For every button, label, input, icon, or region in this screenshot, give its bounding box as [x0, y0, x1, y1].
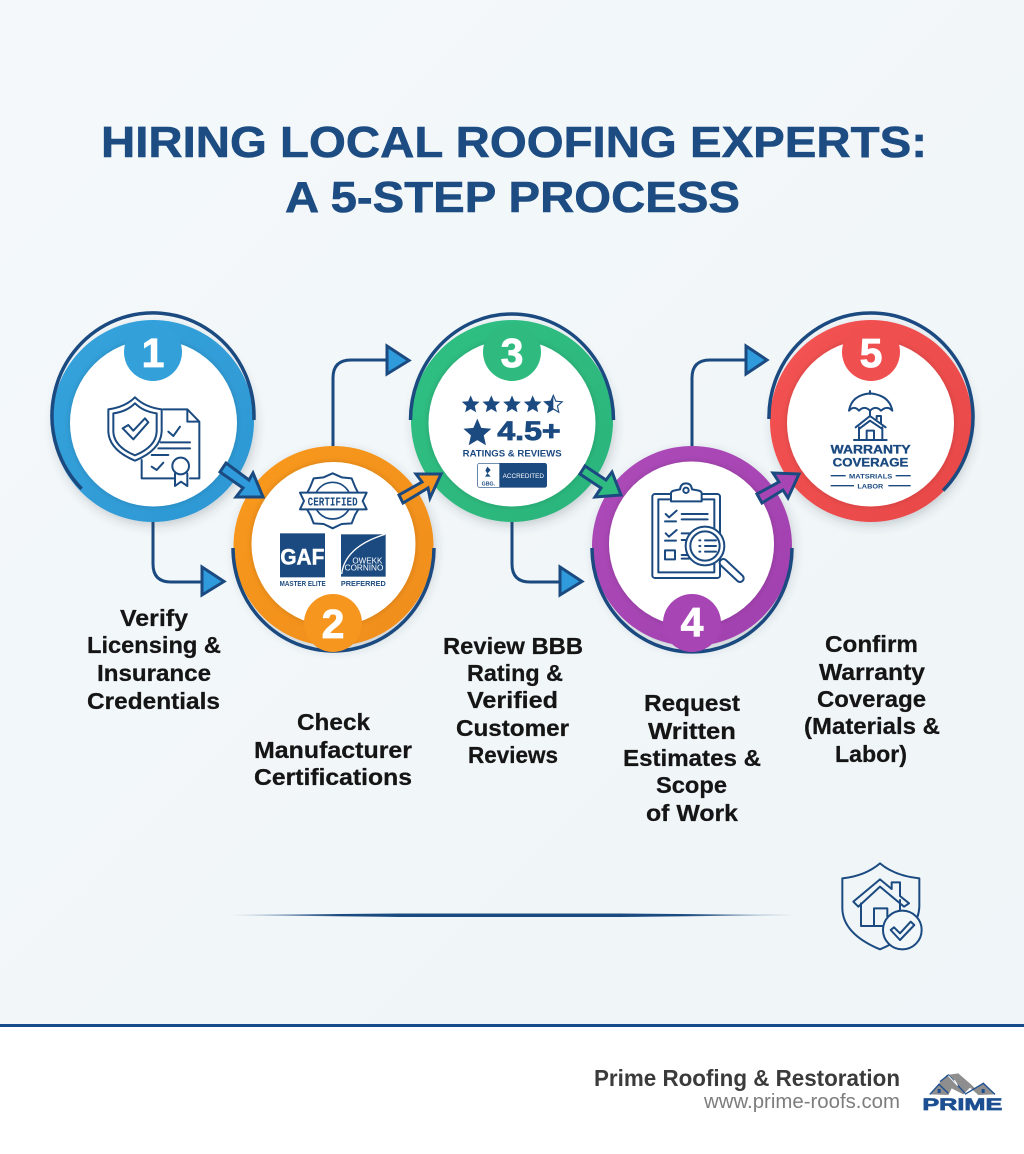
arrow: elbow step 2 to 3 — [333, 346, 409, 448]
number badge 1: 1 — [142, 330, 164, 376]
text block: step 3 label — [443, 633, 583, 768]
BBB accredited badge: ACCREDITED — [503, 473, 544, 480]
text block: step 5 label — [804, 631, 940, 767]
number badge 1 — [124, 323, 182, 381]
icon: ratings and BBB badge — [462, 395, 562, 487]
panel: step 1 circle — [52, 313, 254, 522]
text block: step 3 label: Verified — [467, 687, 558, 713]
icon: shield with house and check — [842, 863, 922, 949]
text block: step 1 label: Insurance — [97, 660, 211, 686]
text block: step 5 label: Coverage — [817, 686, 926, 712]
rating: 4.5+ — [497, 416, 561, 446]
umbrella and house — [849, 391, 892, 440]
title: HIRING LOCAL ROOFING EXPERTS: — [101, 118, 927, 167]
panel: step 2 circle — [233, 446, 434, 652]
icon: certified seal and manufacturer logos — [280, 473, 386, 588]
text block: step 2 label: Certifications — [254, 764, 412, 790]
text block: step 1 label — [87, 605, 221, 714]
Owens Corning logo — [341, 534, 386, 588]
GAF logo — [280, 533, 326, 588]
number badge 4 — [663, 594, 721, 652]
certified seal: CERTIFIED — [308, 495, 358, 509]
text block: step 4 label: Scope — [656, 772, 727, 798]
BBB accredited badge: GBG. — [482, 481, 495, 487]
Owens Corning logo: PREFERRED — [341, 579, 386, 588]
divider line — [225, 914, 800, 917]
text block: step 2 label: Manufacturer — [254, 737, 412, 763]
text block: step 3 label: Reviews — [468, 742, 558, 768]
text block: step 1 label: Licensing & — [87, 632, 221, 658]
text block: step 3 label: Rating & — [467, 660, 563, 686]
number badge 5: 5 — [860, 330, 882, 376]
number badge 3 — [483, 323, 541, 381]
number badge 2: 2 — [322, 601, 344, 647]
warranty text: LABOR — [857, 483, 884, 490]
number badge 2 — [304, 594, 362, 652]
title — [101, 118, 927, 222]
title: A 5-STEP PROCESS — [285, 173, 740, 222]
arrow: elbow step 4 to 5 — [692, 346, 767, 448]
text block: step 5 label: Warranty — [819, 659, 925, 685]
GAF logo: GAF — [280, 544, 324, 569]
panel: step 3 circle — [410, 314, 614, 522]
warranty text: WARRANTY — [831, 442, 911, 456]
text block: step 5 label: Confirm — [825, 631, 918, 657]
icon: umbrella over house with warranty text — [831, 391, 911, 490]
text block: step 2 label — [254, 709, 412, 790]
footer company name and url — [594, 1065, 900, 1113]
panel: step 4 circle — [592, 446, 792, 652]
icon: clipboard and magnifier — [652, 483, 740, 578]
text block: step 4 label: Estimates & — [623, 745, 761, 771]
five stars — [462, 395, 562, 412]
number badge 5 — [842, 323, 900, 381]
text block: step 4 label: Request — [644, 690, 740, 716]
text block: step 3 label: Customer — [456, 715, 569, 741]
text block: step 1 label: Verify — [120, 605, 188, 631]
text block: step 5 label: (Materials & — [804, 713, 940, 739]
BBB accredited badge — [478, 463, 547, 487]
warranty text: COVERAGE — [833, 456, 908, 470]
rating — [463, 416, 562, 459]
number badge 4: 4 — [681, 599, 704, 645]
icon: Prime logo: PRIME — [922, 1095, 1002, 1114]
Owens Corning logo: CORNINO — [345, 564, 383, 573]
rating: RATINGS & REVIEWS — [463, 449, 562, 459]
arrow: step 4 to step 5 — [757, 473, 799, 503]
text block: step 5 label: Labor) — [835, 741, 907, 767]
icon: shield and certificate — [108, 397, 199, 486]
text block: step 3 label: Review BBB — [443, 633, 583, 659]
footer company name and url: Prime Roofing & Restoration — [594, 1065, 900, 1091]
text block: step 1 label: Credentials — [87, 688, 220, 714]
footer company name and url: www.prime-roofs.com — [703, 1091, 900, 1113]
Owens Corning logo: OWEKK — [352, 557, 383, 566]
text block: step 4 label: of Work — [646, 800, 738, 826]
text block: step 2 label: Check — [297, 709, 370, 735]
warranty text — [831, 442, 911, 490]
arrow: elbow step 3 to 4 — [512, 522, 582, 595]
footer band — [0, 1024, 1024, 1154]
text block: step 4 label — [623, 690, 761, 826]
arrow: elbow step 1 to 2 — [153, 522, 224, 595]
number badge 3: 3 — [501, 330, 523, 376]
panel: step 5 circle — [769, 313, 973, 522]
text block: step 4 label: Written — [648, 718, 736, 744]
arrow: step 1 to step 2 — [220, 463, 263, 497]
GAF logo: MASTER ELITE — [280, 579, 326, 588]
arrow: step 2 to step 3 — [399, 474, 441, 503]
arrow: step 3 to step 4 — [580, 466, 621, 497]
warranty text: MATSRIALS — [849, 473, 893, 480]
icon: Prime logo — [922, 1073, 1002, 1114]
